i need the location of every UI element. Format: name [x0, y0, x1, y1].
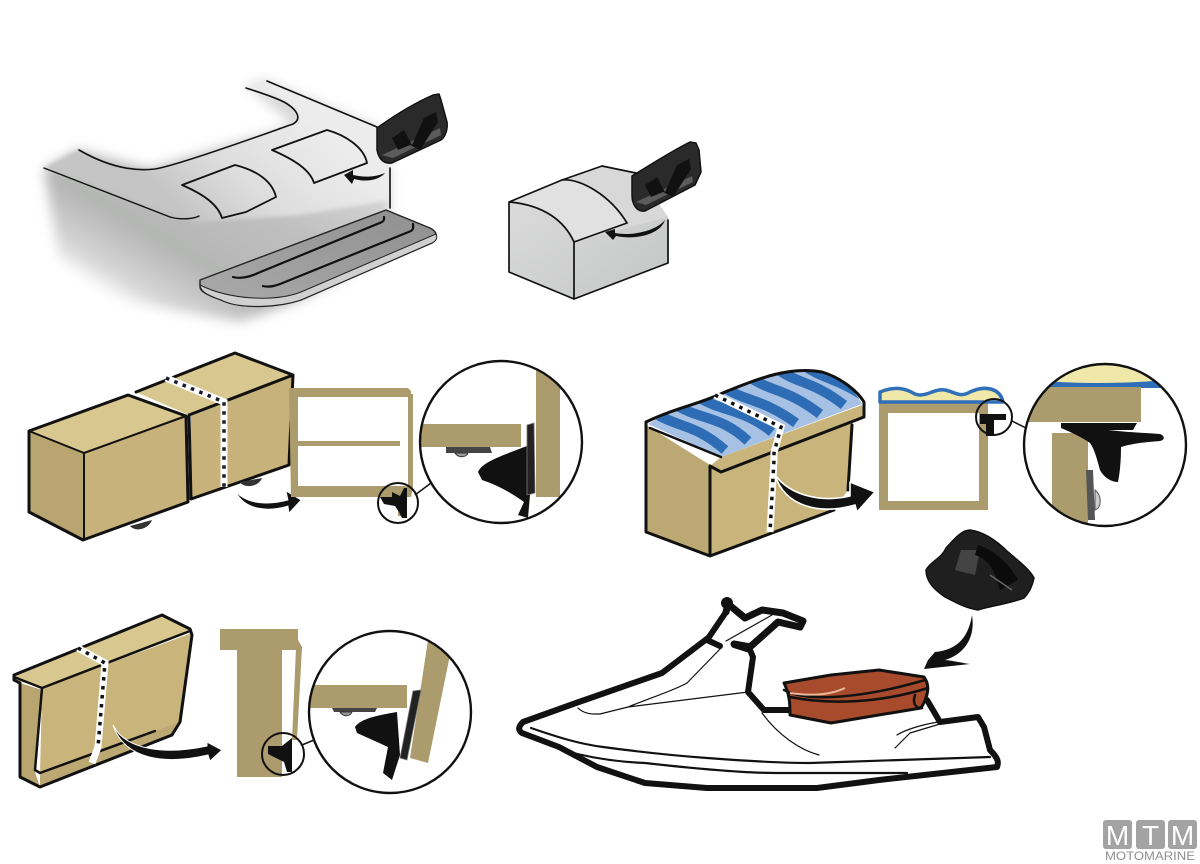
illustration: bench seat: [14, 615, 222, 787]
drawer: front: [29, 395, 188, 540]
logo: MTM Motomarine: T: [1142, 820, 1159, 851]
illustration: cushioned storage box: [646, 364, 875, 556]
arrow: [605, 220, 665, 240]
logo: MTM Motomarine: [1103, 820, 1197, 863]
illustration: small grey box with lid: [509, 142, 701, 299]
arrow: [775, 475, 875, 512]
detail: small circle on drawer latch: [378, 483, 431, 523]
icon: dark latch: [377, 94, 447, 163]
logo: MTM Motomarine: M: [1106, 820, 1129, 851]
red seat: [784, 670, 928, 723]
detail: big circle drawer latch: [415, 361, 582, 523]
drawer cross-section: [289, 388, 413, 497]
hull outline: [519, 638, 998, 788]
detail: big circle cushion latch: [1020, 360, 1190, 528]
logo: MTM Motomarine: M: [1171, 820, 1194, 851]
step plate: [200, 210, 437, 306]
arrow: [236, 491, 301, 513]
hatch: right: [272, 130, 367, 183]
dotted strap: [715, 395, 781, 532]
cushion lid: [646, 364, 864, 472]
arrow: latch to seat: [924, 615, 973, 669]
cushion box cross-section: [879, 388, 1026, 510]
drawer: rear: [136, 353, 293, 499]
bench cross-section: [220, 629, 314, 777]
icon: dark latch: [632, 142, 701, 211]
hatch: left: [182, 165, 276, 218]
handlebars: [721, 597, 803, 647]
logo: MTM Motomarine: MOTOMARINE: [1105, 851, 1195, 863]
dotted strap: [78, 648, 105, 763]
detail: big circle bench latch: [305, 631, 471, 793]
icon: latch above seat: [926, 530, 1034, 610]
arrow: [344, 170, 385, 184]
illustration: jet ski: [519, 597, 998, 788]
hull lines: [531, 728, 990, 763]
detail: small circle: [976, 399, 1026, 436]
illustration: grey seat base with two hatches and step: [44, 81, 447, 322]
illustration: double drawer box: [29, 353, 301, 540]
detail: small circle: [262, 733, 314, 775]
arrow: [113, 725, 222, 761]
